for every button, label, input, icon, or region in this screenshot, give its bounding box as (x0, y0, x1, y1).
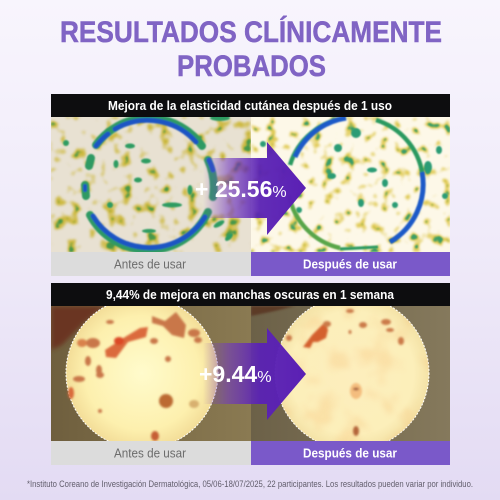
elasticity arrow with value: + 25.56% (195, 176, 287, 202)
blue ring (289, 118, 423, 249)
after label (251, 252, 450, 276)
after label: Después de usar (303, 446, 397, 460)
after dark spots photo (251, 306, 450, 441)
dark spots heading bar (51, 283, 450, 306)
title (60, 15, 442, 83)
dark spots arrow with value: +9.44% (199, 361, 271, 387)
dark spots heading bar: 9,44% de mejora en manchas oscuras en 1 semana (106, 287, 395, 302)
after label: Después de usar (303, 256, 397, 272)
title: RESULTADOS CLÍNICAMENTE (60, 15, 442, 49)
before elasticity skin map (51, 115, 251, 252)
elasticity heading bar: Mejora de la elasticidad cutánea después de 1 uso (108, 98, 392, 113)
title: PROBADOS (177, 50, 326, 83)
panel: elasticity (51, 94, 450, 276)
dark spots arrow with value (195, 328, 306, 420)
before label (51, 252, 251, 276)
after label (251, 441, 450, 465)
elasticity heading bar (51, 94, 450, 117)
panel: dark spots (51, 283, 450, 465)
after elasticity skin map (251, 117, 450, 252)
before label: Antes de usar (114, 256, 187, 272)
before dark spots photo (51, 306, 251, 441)
blue ring (85, 118, 214, 250)
elasticity arrow with value (195, 142, 306, 235)
before label (51, 441, 251, 465)
before label: Antes de usar (114, 446, 187, 460)
